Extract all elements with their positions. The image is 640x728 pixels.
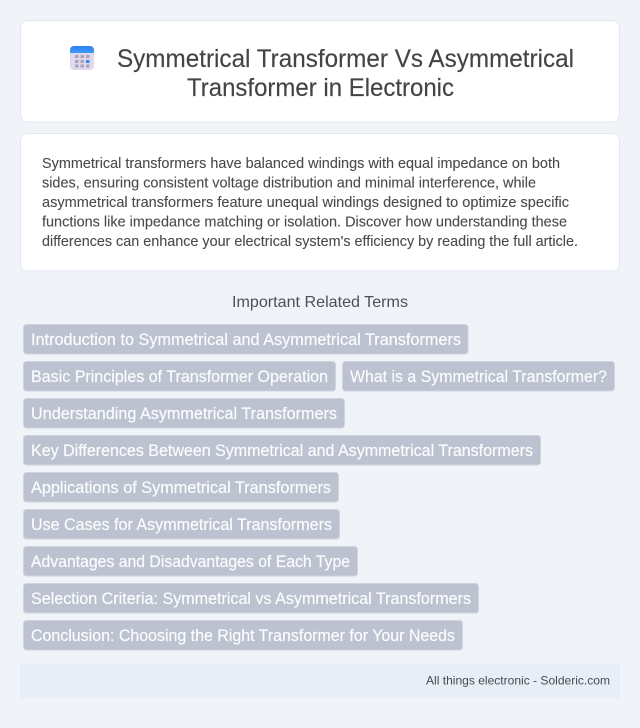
tag: understanding asymmetrical: Understanding Asymmetrical Transformers bbox=[31, 405, 337, 423]
tag: advantages: Advantages and Disadvantages of Each Type bbox=[31, 553, 350, 571]
tag: selection criteria: Selection Criteria: Symmetrical vs Asymmetrical Transformers bbox=[31, 590, 471, 608]
description text bbox=[42, 156, 578, 250]
description text: Symmetrical transformers have balanced windings with equal impedance on both bbox=[42, 156, 560, 172]
title: Symmetrical Transformer Vs Asymmetrical bbox=[117, 45, 574, 73]
description text: asymmetrical transformers feature unequal windings designed to optimize specific bbox=[42, 195, 569, 211]
tag: understanding asymmetrical bbox=[24, 398, 344, 428]
tag: conclusion: Conclusion: Choosing the Right Transformer for Your Needs bbox=[31, 627, 455, 645]
description text: sides, ensuring consistent voltage distribution and minimal interference, while bbox=[42, 176, 536, 192]
panel: title card bbox=[20, 20, 620, 122]
tag: advantages bbox=[24, 546, 358, 576]
tag: key differences bbox=[24, 436, 540, 465]
tag: applications: Applications of Symmetrical Transformers bbox=[31, 479, 331, 497]
title: Transformer in Electronic bbox=[187, 74, 454, 102]
tag: what is symmetrical: What is a Symmetrical Transformer? bbox=[350, 368, 607, 386]
heading: important related terms: Important Related Terms bbox=[232, 294, 408, 311]
tag: conclusion bbox=[24, 620, 462, 650]
tag: key differences: Key Differences Between Symmetrical and Asymmetrical Transformers bbox=[31, 442, 533, 460]
description text: functions like impedance matching or isolation. Discover how understanding these bbox=[42, 214, 567, 230]
footer bbox=[20, 664, 620, 698]
tag: basic principles: Basic Principles of Transformer Operation bbox=[31, 368, 328, 386]
panel: description card bbox=[20, 134, 620, 271]
tag: use cases bbox=[24, 510, 340, 539]
description text: differences can enhance your electrical system's efficiency by reading the full article. bbox=[42, 234, 578, 250]
tag: introduction: Introduction to Symmetrical and Asymmetrical Transformers bbox=[31, 331, 461, 349]
footer: All things electronic - Solderic.com bbox=[426, 674, 610, 688]
tag: applications bbox=[24, 472, 338, 502]
tag: selection criteria bbox=[24, 584, 478, 613]
tag list bbox=[24, 324, 614, 650]
tag: what is symmetrical bbox=[342, 362, 614, 391]
tag: basic principles bbox=[24, 362, 336, 391]
title bbox=[117, 45, 574, 102]
icon: calendar bbox=[70, 46, 94, 70]
tag: use cases: Use Cases for Asymmetrical Transformers bbox=[31, 516, 332, 534]
tag: introduction bbox=[24, 324, 468, 354]
